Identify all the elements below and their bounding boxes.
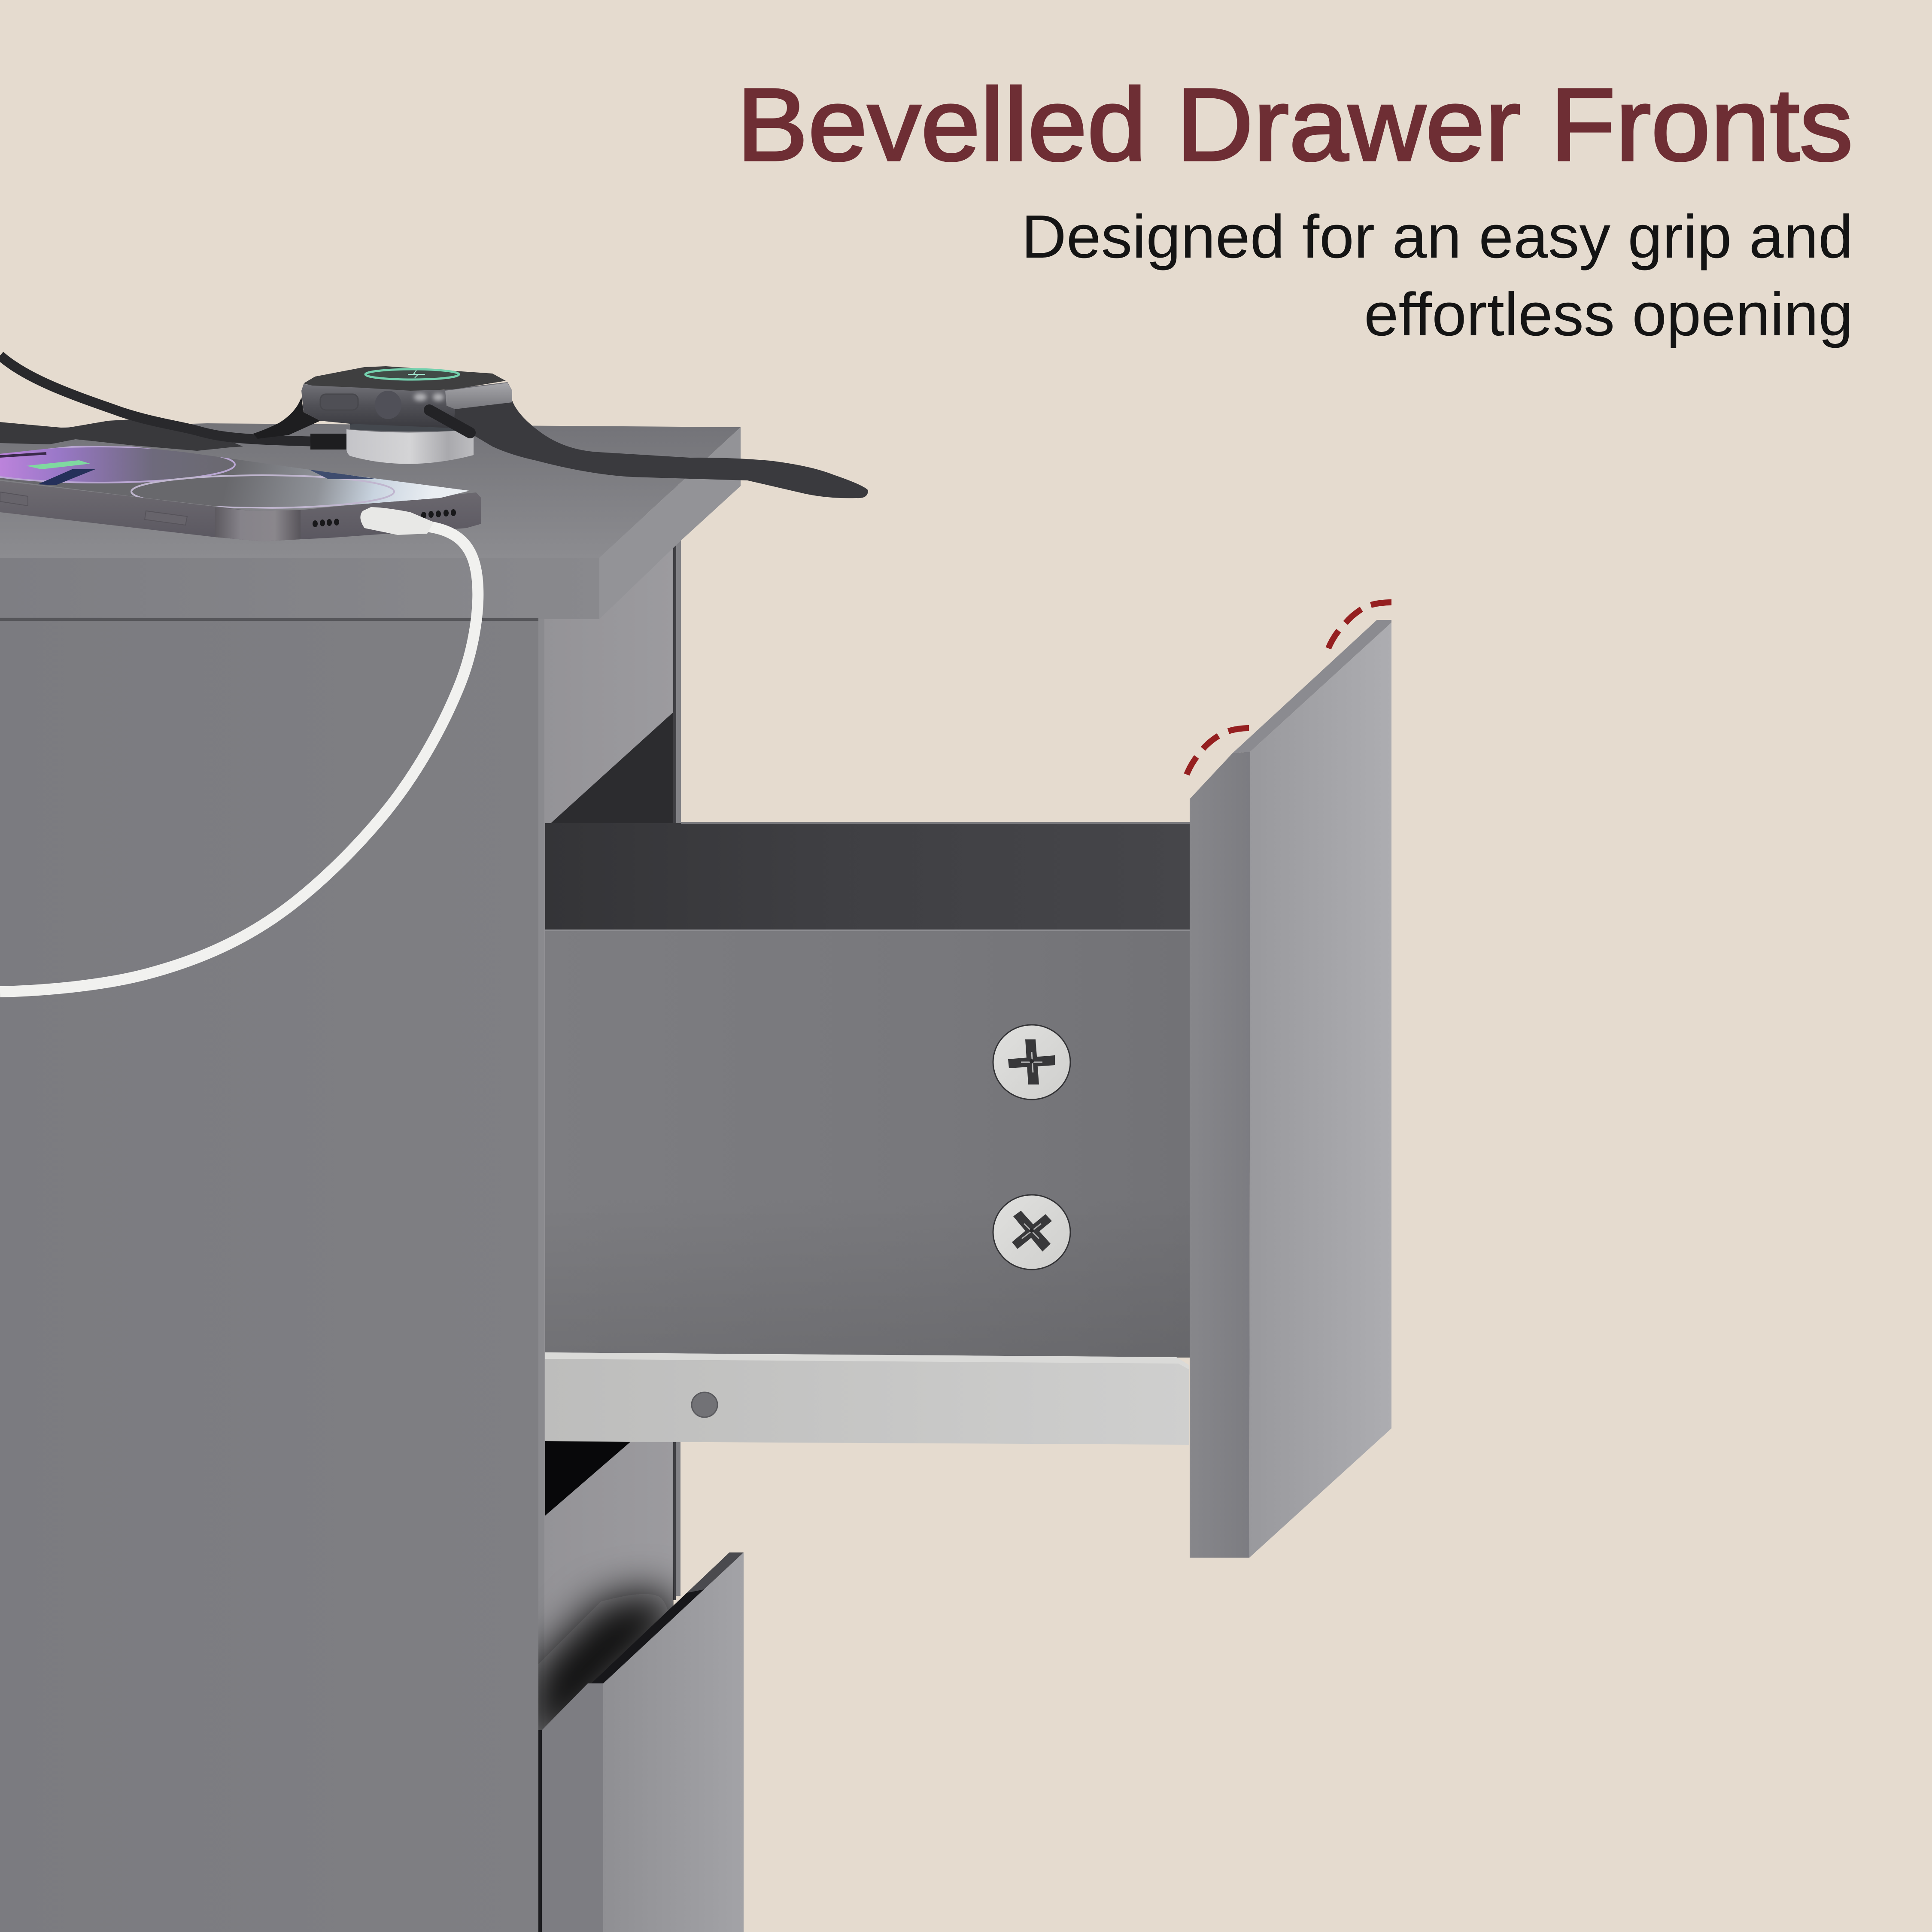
- watch crown: [375, 391, 401, 419]
- black charging cable: [0, 355, 310, 441]
- top surface: [0, 423, 741, 558]
- subtitle: effortless opening: [1364, 280, 1853, 349]
- second camera ring: [131, 475, 394, 508]
- dark gap above open drawer: [545, 712, 673, 828]
- watch band right: [427, 401, 868, 498]
- watch green ring: [365, 369, 459, 380]
- phone corner highlight: [215, 507, 301, 541]
- lower drawer front: [603, 1552, 744, 1932]
- watch band left strap: [253, 397, 320, 439]
- charger rim: [350, 422, 466, 431]
- screw: rotated cross: [993, 1195, 1070, 1270]
- watch body: [301, 382, 512, 428]
- notch: [0, 453, 46, 456]
- watch strap pin: [429, 410, 470, 433]
- white charging cable: [0, 507, 478, 992]
- metal rail: [545, 1352, 1189, 1445]
- open drawer: [545, 822, 1190, 1445]
- speaker holes: [313, 509, 456, 527]
- title: Bevelled Drawer Fronts: [737, 67, 1853, 182]
- watch charger dock: [310, 422, 474, 464]
- main front face: [1249, 623, 1391, 1558]
- dashed bevel arc: left: [1187, 728, 1249, 775]
- USB plug: [360, 507, 434, 535]
- cabinet front: [0, 617, 538, 1932]
- bevel left face: [1190, 752, 1250, 1558]
- watch highlights: [414, 393, 427, 401]
- rail hole: [692, 1392, 717, 1417]
- blue reflection: [309, 469, 378, 479]
- lower drawer top edge: [542, 1552, 744, 1730]
- watch light side: [445, 383, 512, 409]
- dashed bevel arc: right: [1328, 602, 1391, 648]
- subtitle: [1021, 203, 1853, 349]
- drawer side wall: [545, 930, 1190, 1358]
- phone frame: [0, 481, 481, 541]
- phone: [0, 446, 481, 541]
- top front edge: [0, 558, 599, 619]
- side button: [145, 511, 187, 525]
- bevel top face: [1233, 620, 1391, 753]
- green status bar: [26, 460, 90, 469]
- phone screen: [0, 446, 470, 509]
- watch side button: [320, 394, 358, 410]
- shadow above lower drawer: [528, 1589, 683, 1743]
- screw: upright cross: [993, 1025, 1070, 1100]
- watch band left on surface: [0, 419, 243, 451]
- cabinet side panel: [538, 485, 681, 1730]
- open drawer front panel: [1190, 620, 1391, 1558]
- cabinet top: [0, 423, 741, 621]
- charger plug: [310, 434, 346, 450]
- drawer interior back wall: [545, 823, 1190, 930]
- purple wallpaper ring: [0, 447, 235, 483]
- lower drawer: [538, 1552, 744, 1932]
- dark gap below open drawer: [545, 1441, 631, 1516]
- subtitle: Designed for an easy grip and: [1021, 203, 1853, 271]
- watch: [301, 366, 512, 433]
- lower drawer bevel: [542, 1683, 603, 1932]
- watch face: [304, 366, 506, 391]
- top right edge: [599, 427, 741, 619]
- dark stripe: [38, 469, 95, 485]
